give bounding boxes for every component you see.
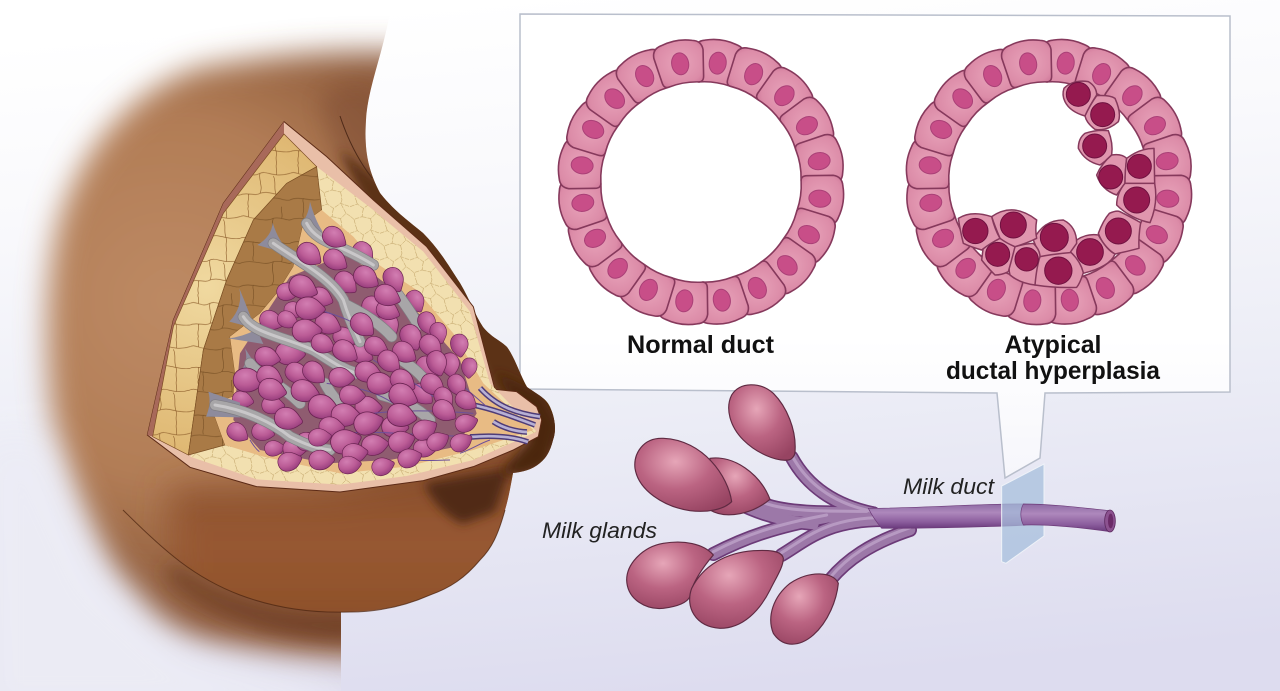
lower breast xyxy=(158,450,516,612)
milk gland bulbs xyxy=(627,385,838,644)
pale fade on lower left chest xyxy=(0,440,341,691)
milk gland and duct illustration xyxy=(627,385,1115,644)
normal duct ring of cells xyxy=(555,36,847,328)
main duct left of cross-section xyxy=(868,504,1025,528)
areola shade xyxy=(500,376,555,479)
heading: atypical ductal hyperplasia: ductal hyperplasia xyxy=(946,357,1161,385)
panel: magnified callout with pointer xyxy=(520,14,1230,478)
cutaway section of the breast xyxy=(147,122,542,492)
dark shadow beneath the areola xyxy=(424,468,510,524)
heading: normal duct: Normal duct xyxy=(627,331,775,359)
left inner skin strip xyxy=(147,122,284,437)
atypical duct with proliferating cells xyxy=(903,36,1195,328)
label: milk glands: Milk glands xyxy=(542,518,657,543)
dense tissue shadow xyxy=(233,253,477,463)
shade under the breast xyxy=(170,560,360,640)
left fat layer xyxy=(153,134,317,455)
outer fat layer xyxy=(190,167,537,485)
abnormal cells xyxy=(958,81,1156,288)
label: milk duct: Milk duct xyxy=(903,474,995,499)
heading: atypical ductal hyperplasia xyxy=(946,331,1161,385)
glandular tissue background xyxy=(210,210,533,473)
fibrous ligaments xyxy=(206,202,430,450)
lobules behind fibres xyxy=(224,238,462,458)
duct branches xyxy=(713,455,910,580)
heading: atypical ductal hyperplasia: Atypical xyxy=(1004,331,1102,359)
lobules in front of fibres xyxy=(233,223,481,478)
duct open end xyxy=(1105,510,1115,532)
skin edge of cut xyxy=(147,122,542,492)
breast contour line xyxy=(123,510,505,612)
main duct right of cross-section xyxy=(1021,504,1110,532)
ducts converging at nipple xyxy=(250,310,540,461)
breast body and chest xyxy=(0,52,620,691)
inner brown chest-wall layer xyxy=(188,167,322,455)
fold line near chest xyxy=(340,116,372,178)
shaded band near chest fold xyxy=(322,87,378,188)
cross-section plane xyxy=(1002,464,1044,563)
